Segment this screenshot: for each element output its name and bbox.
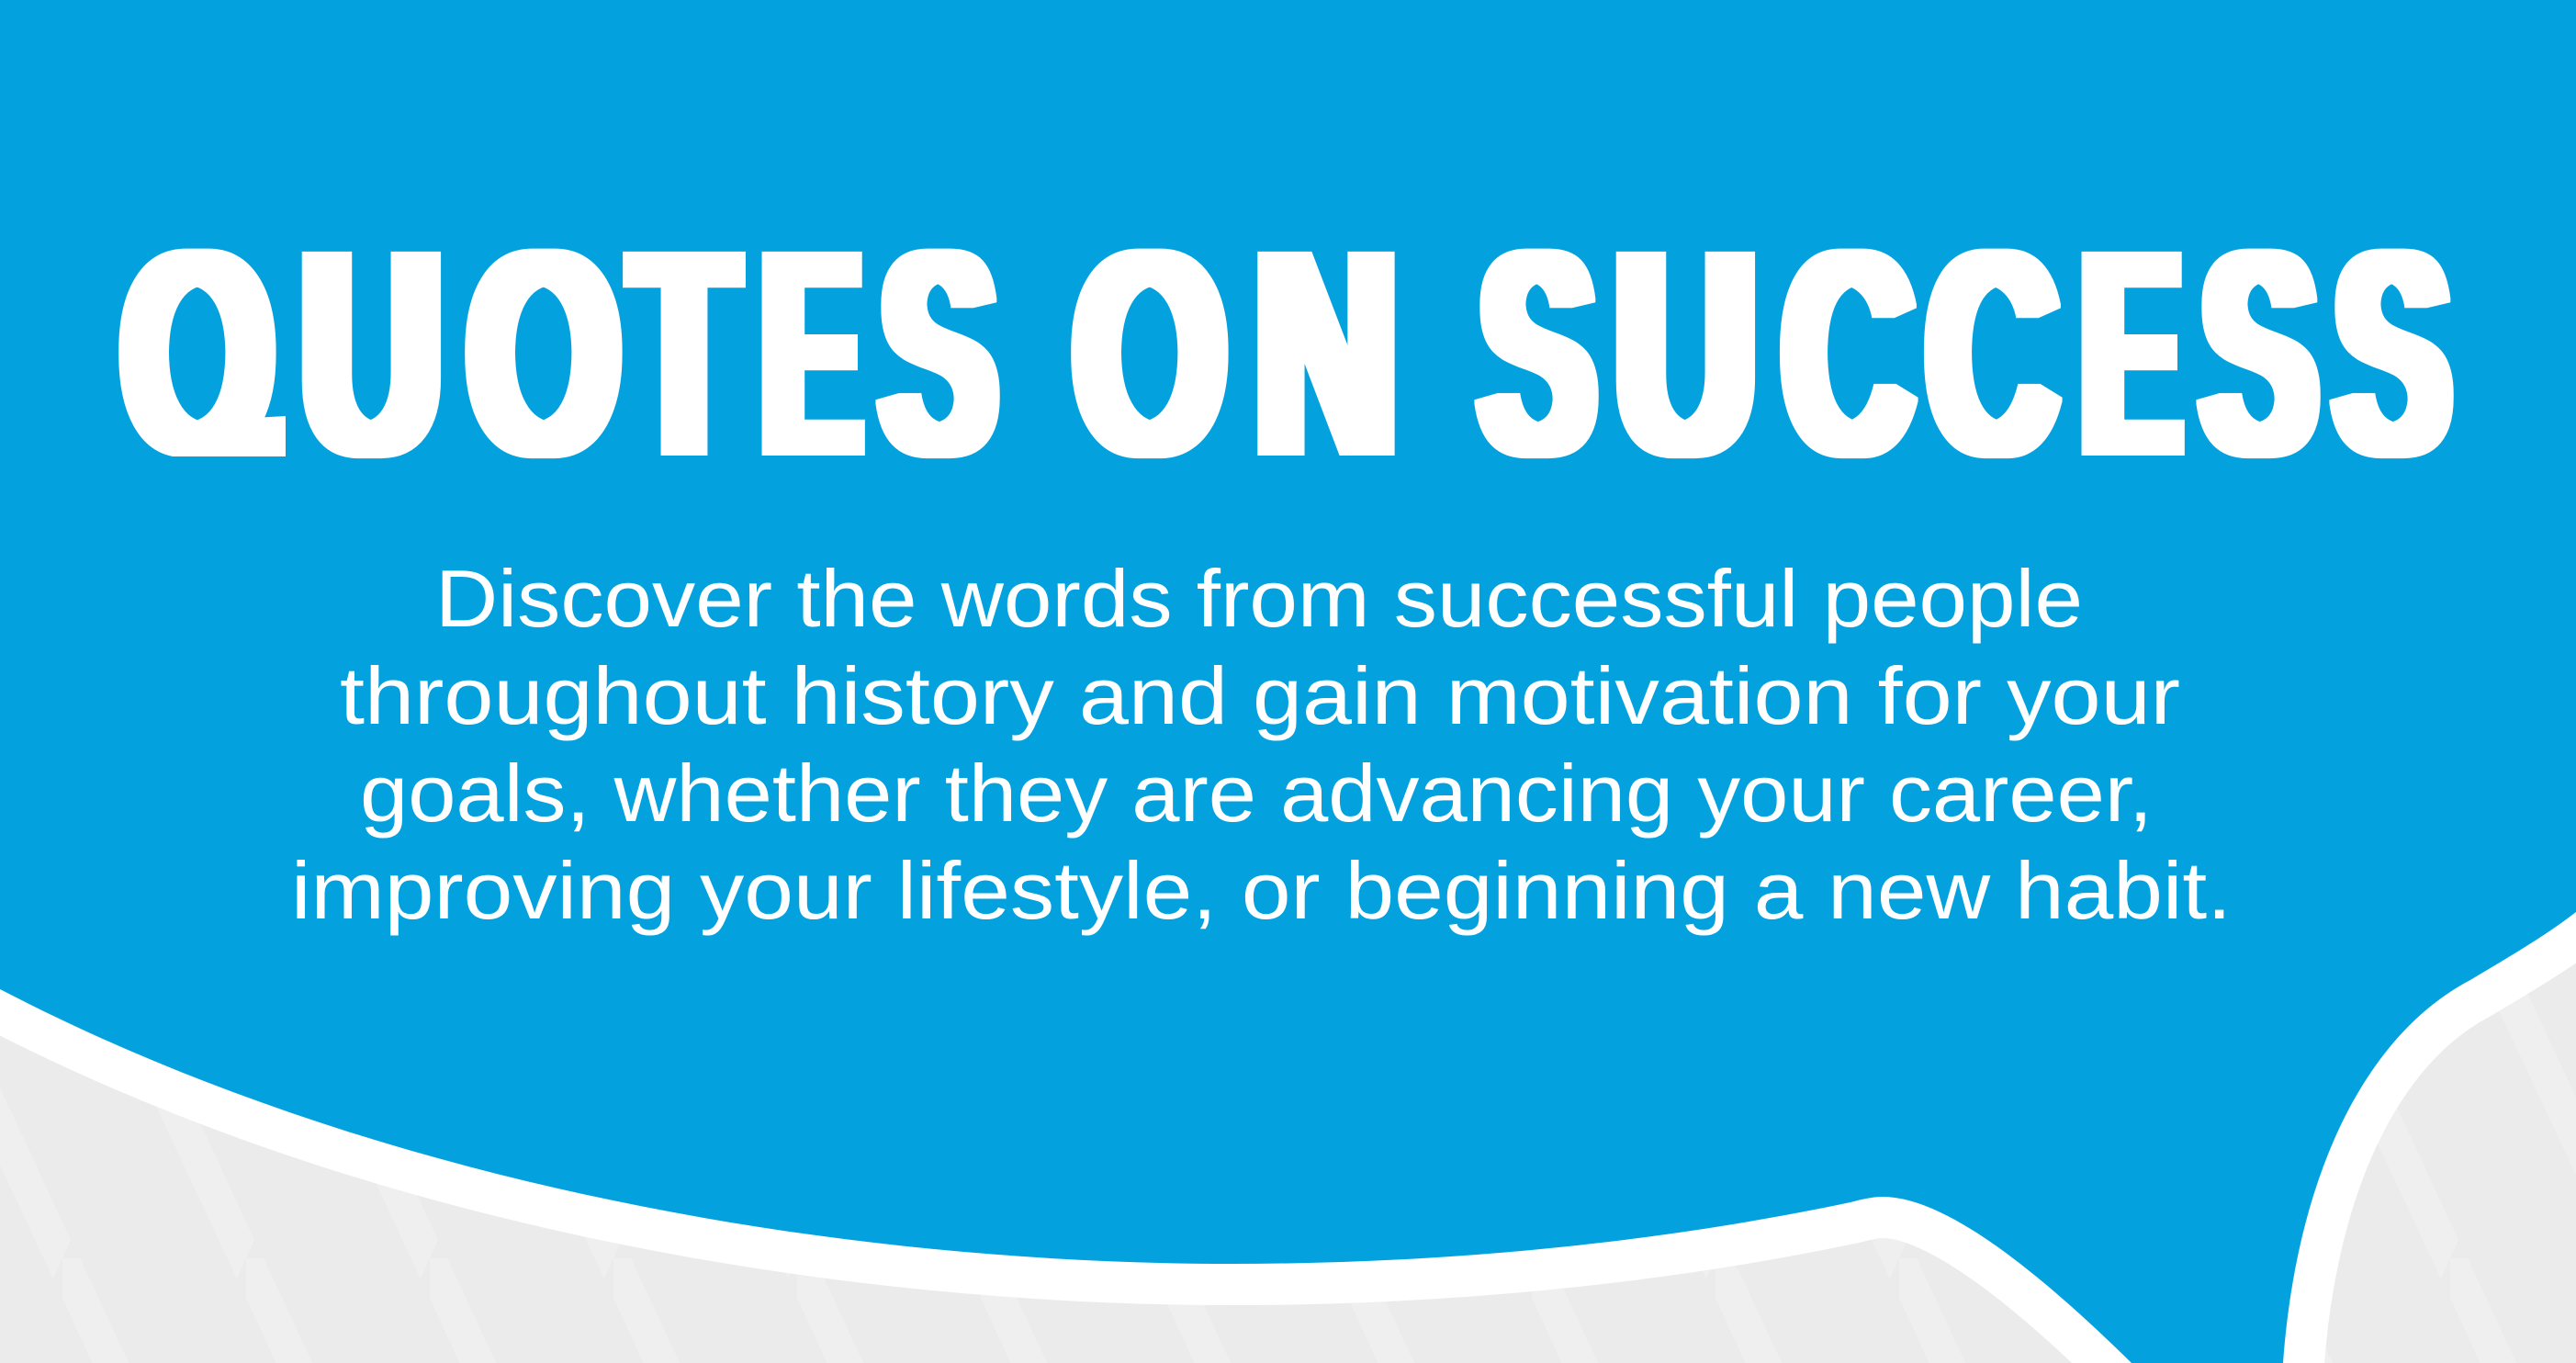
title: S xyxy=(2202,191,2316,516)
title: O xyxy=(468,191,619,516)
subtitle text block: improving your lifestyle, or beginning a new habit. xyxy=(291,845,2232,936)
title: S xyxy=(882,191,996,516)
title: U xyxy=(301,191,442,516)
subtitle text block xyxy=(291,553,2232,936)
title: T xyxy=(632,191,737,516)
title: S xyxy=(2335,191,2449,516)
subtitle text block: goals, whether they are advancing your career, xyxy=(360,748,2153,839)
title: E xyxy=(763,191,860,516)
title: O xyxy=(1074,191,1225,516)
subtitle text block: throughout history and gain motivation for your xyxy=(340,650,2180,741)
title: C xyxy=(1928,191,2056,516)
title: S xyxy=(1480,191,1594,516)
title xyxy=(118,248,2454,459)
title: N xyxy=(1255,191,1397,516)
title: U xyxy=(1615,191,1756,516)
subtitle text block: Discover the words from successful people xyxy=(435,553,2083,644)
title: E xyxy=(2083,191,2179,516)
title: Q xyxy=(121,191,274,516)
title: C xyxy=(1783,191,1912,516)
